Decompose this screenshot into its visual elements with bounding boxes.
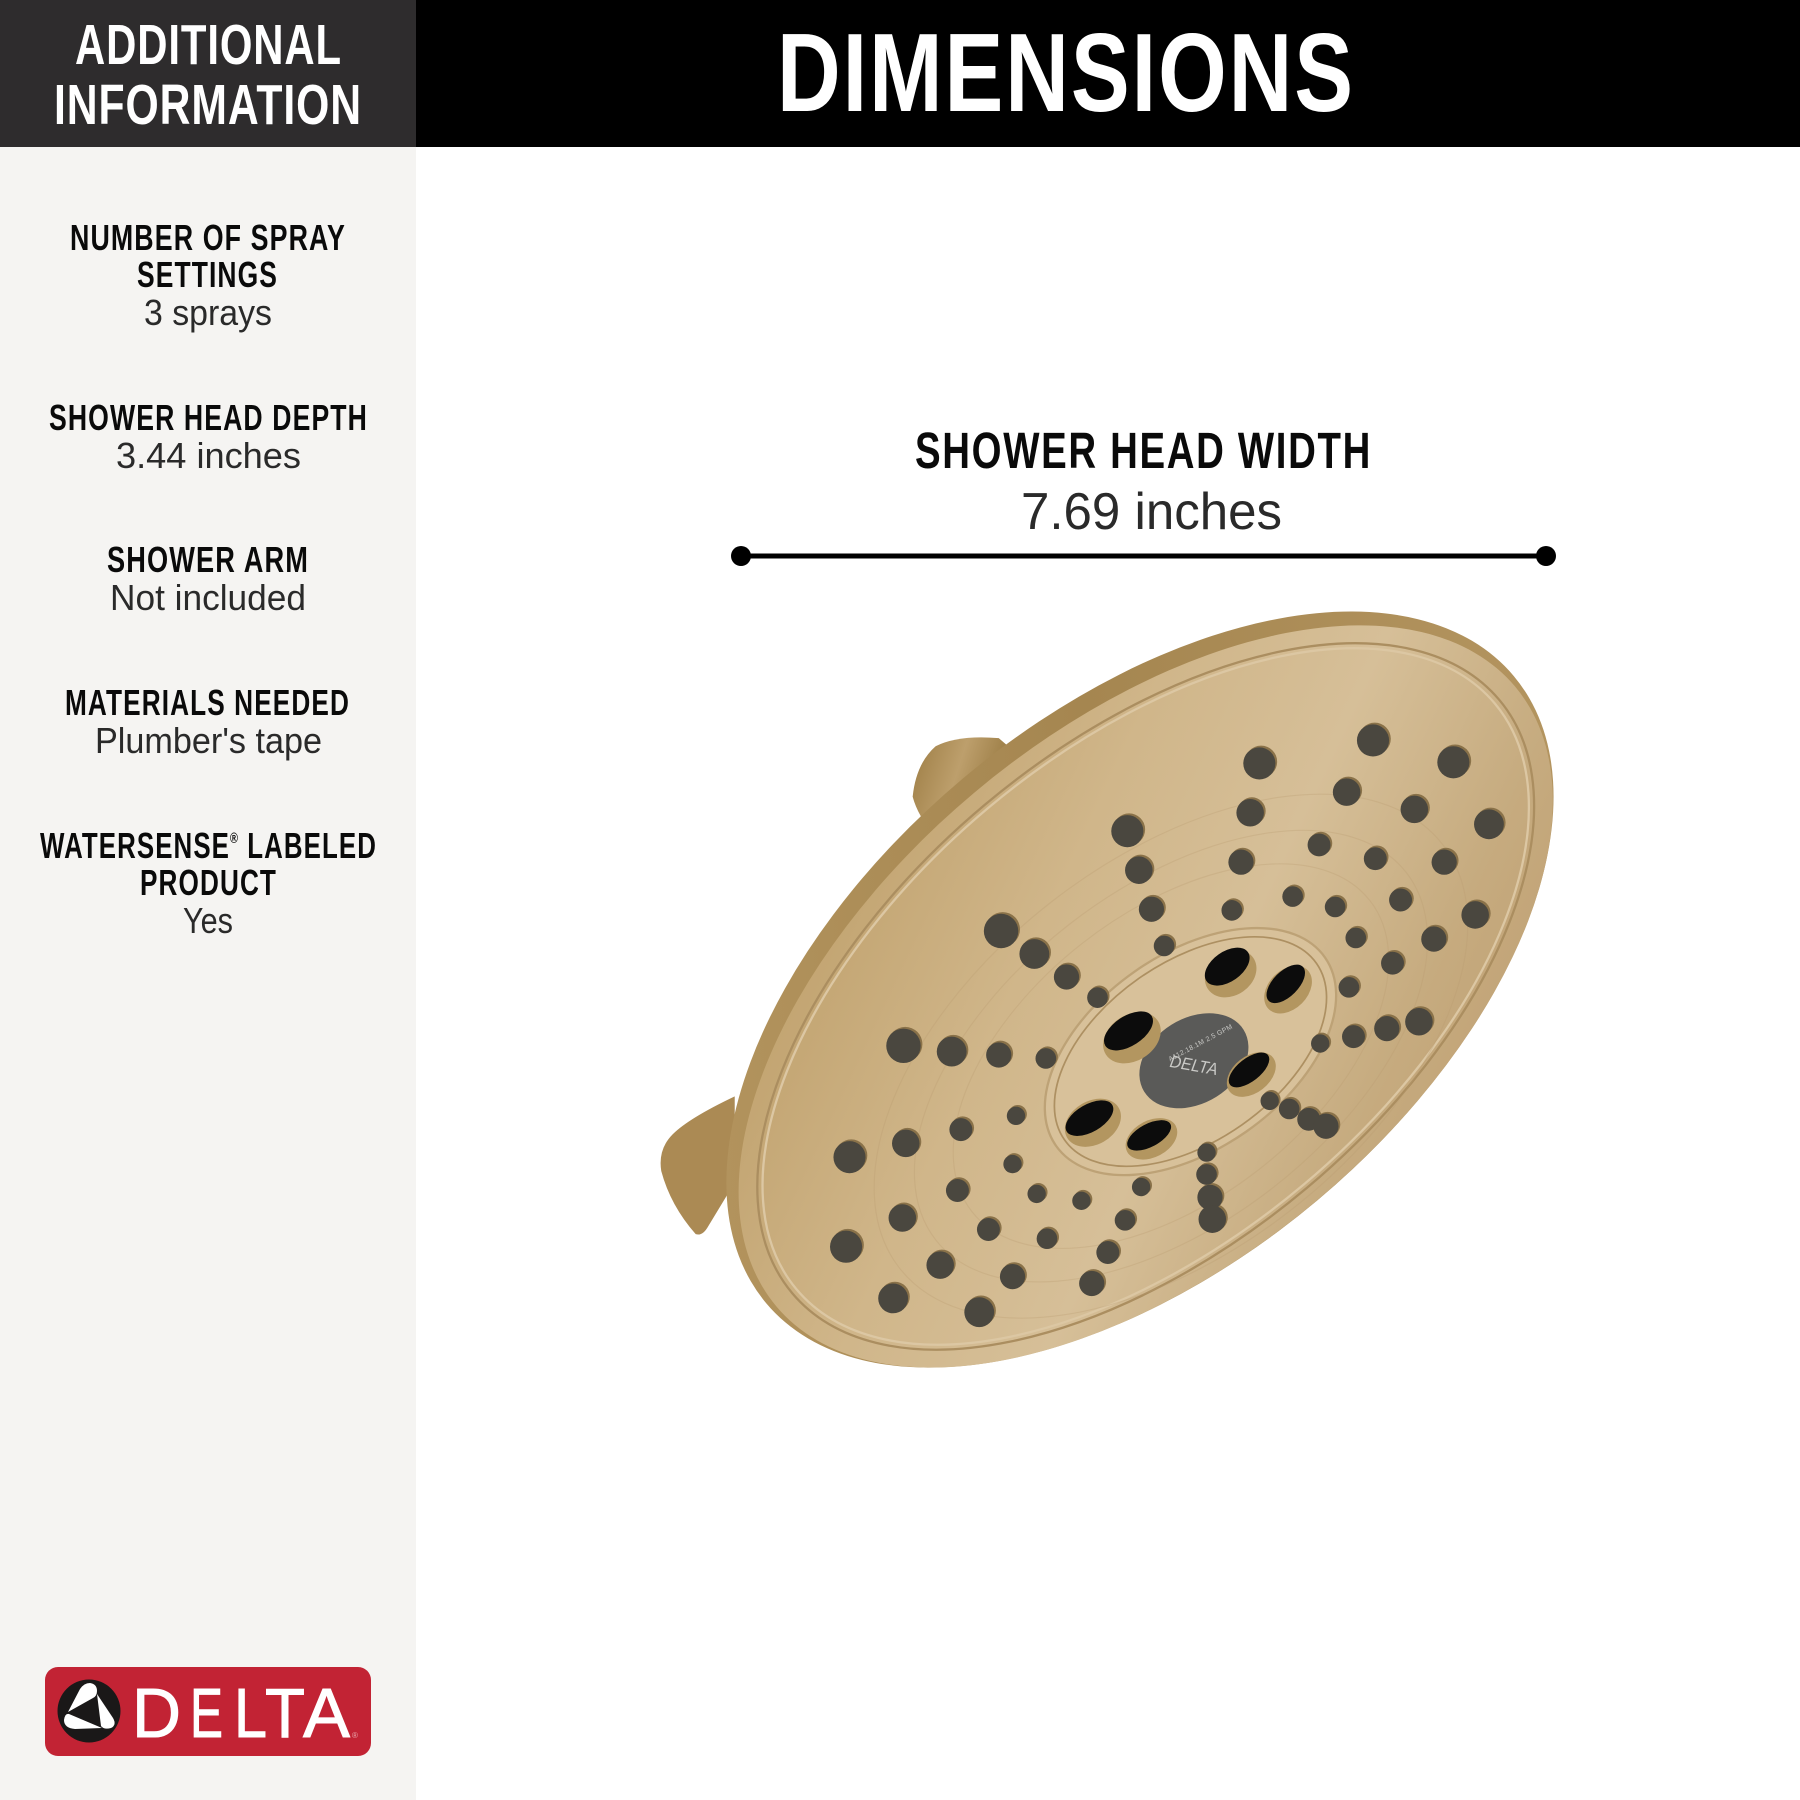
spec: number of spray settings xyxy=(70,217,346,333)
dimension label: shower head width: SHOWER HEAD WIDTH xyxy=(915,422,1372,479)
title banner: dimensions: DIMENSIONS xyxy=(777,11,1355,135)
dimension label: shower head width xyxy=(915,422,1372,541)
back rim xyxy=(589,465,1691,1514)
spec: materials needed xyxy=(65,682,350,761)
spec: shower arm: SHOWER ARM xyxy=(107,539,309,580)
panel: sidebar header xyxy=(0,0,416,147)
wordmark letters: L xyxy=(234,1674,267,1752)
side handle xyxy=(661,1096,735,1235)
face xyxy=(605,483,1686,1510)
nozzles xyxy=(830,723,1506,1327)
spec: shower head depth xyxy=(49,397,368,476)
rim grooves xyxy=(631,508,1660,1485)
title banner: dimensions xyxy=(416,0,1800,147)
spec: watersense labeled product xyxy=(40,825,377,941)
wordmark letters: D xyxy=(132,1674,181,1752)
spec: shower arm xyxy=(107,539,309,618)
spec: materials needed: Plumber's tape xyxy=(95,720,322,761)
spec: watersense labeled product: Yes xyxy=(183,900,233,941)
panel: sidebar header: ADDITIONAL xyxy=(75,13,342,77)
center badge with delta text xyxy=(1122,994,1266,1128)
logo: delta: ® xyxy=(352,1731,358,1740)
spec: materials needed: MATERIALS NEEDED xyxy=(65,682,350,723)
spec: number of spray settings: NUMBER OF SPRAY xyxy=(70,217,346,258)
panel: sidebar header: INFORMATION xyxy=(54,73,362,137)
dimension line xyxy=(731,546,1556,566)
icon: delta triangle mark xyxy=(58,1680,120,1742)
spec: number of spray settings: SETTINGS xyxy=(137,254,278,295)
shower arm connector xyxy=(913,737,1015,832)
spec: shower head depth: SHOWER HEAD DEPTH xyxy=(49,397,368,438)
wordmark letters: T xyxy=(265,1674,305,1752)
spec: shower arm: Not included xyxy=(110,577,306,618)
panel: sidebar background xyxy=(0,147,416,1800)
product: shower head xyxy=(589,465,1691,1514)
center badge with delta text: A112.18.1M 2.5 GPM xyxy=(1168,1024,1234,1063)
spec: shower head depth: 3.44 inches xyxy=(116,435,301,476)
wordmark letters: E xyxy=(190,1674,223,1752)
central boss xyxy=(1000,877,1381,1226)
dimension label: shower head width: 7.69 inches xyxy=(1021,483,1282,541)
spec: watersense labeled product: PRODUCT xyxy=(140,862,277,903)
logo: delta xyxy=(45,1667,371,1756)
spec: number of spray settings: 3 sprays xyxy=(144,292,272,333)
spec: watersense labeled product: ® xyxy=(230,830,239,847)
center spray holes xyxy=(1056,940,1321,1168)
wordmark letters: A xyxy=(303,1674,350,1752)
wordmark letters xyxy=(132,1674,350,1752)
spec: watersense labeled product: LABELED xyxy=(239,825,377,866)
spec: watersense labeled product: WATERSENSE xyxy=(40,825,304,866)
center badge with delta text: DELTA xyxy=(1168,1051,1219,1079)
